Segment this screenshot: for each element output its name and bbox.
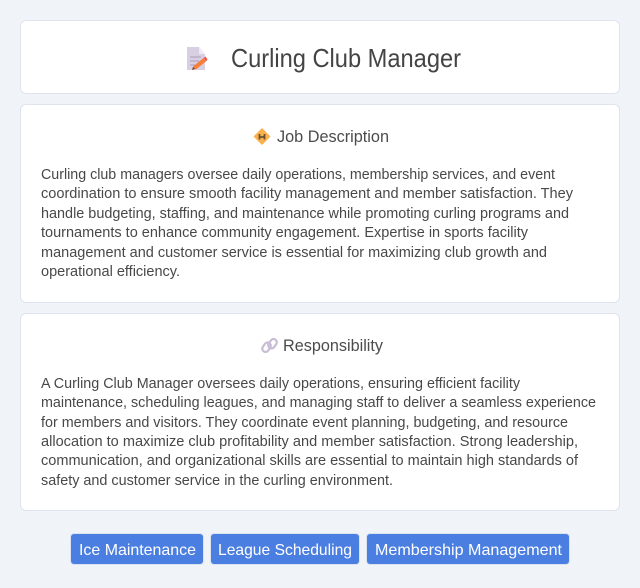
text: job description paragraph: tournaments to enhance community engagement. Expertise in sports facility [41, 225, 529, 241]
heading: responsibility: Responsibility [283, 336, 384, 355]
text: responsibility paragraph: safety and customer service in the curling environment. [41, 473, 393, 489]
text: responsibility paragraph: allocation to maximize club profitability and member satisfaction. Strong leadership, [41, 434, 578, 450]
text: job description paragraph: Curling club managers oversee daily operations, membership services, and event [41, 167, 555, 183]
tag labels: Membership Management [375, 542, 563, 559]
text: job description paragraph: management and customer service is essential for maximizing club growth and [41, 245, 547, 261]
panel: responsibility card [20, 313, 620, 511]
text: job description paragraph: operational efficiency. [41, 264, 180, 280]
text: responsibility paragraph: A Curling Club Manager oversees daily operations, ensuring efficient facility [41, 376, 521, 392]
panel: job description card [20, 104, 620, 303]
panel: title card [20, 20, 620, 94]
tag: membership management [367, 534, 569, 564]
icon: orange diamond [254, 129, 270, 144]
icon: chain link [261, 338, 278, 353]
text: responsibility paragraph [41, 376, 596, 489]
tag labels [79, 542, 563, 559]
tag labels: League Scheduling [218, 542, 352, 559]
tag labels: Ice Maintenance [79, 542, 196, 559]
text: responsibility paragraph: for members and visitors. They coordinate event planning, budgeting, and resource [41, 415, 568, 431]
text: responsibility paragraph: maintenance, scheduling leagues, and managing staff to deliver a seamless experience [41, 395, 596, 411]
text: job description paragraph: handle budgeting, staffing, and maintenance while promoting curling programs and [41, 206, 569, 222]
text: job description paragraph: coordination to ensure smooth facility management and member satisfaction. They [41, 186, 574, 202]
text: responsibility paragraph: communication, and organizational skills are essential to maintain high standards of [41, 453, 579, 469]
text: job description paragraph [41, 167, 574, 280]
tag: league scheduling [211, 534, 359, 564]
tag: ice maintenance [71, 534, 203, 564]
icon: document with pencil [187, 47, 208, 70]
title: Curling Club Manager [231, 43, 461, 73]
heading: job description: Job Description [277, 127, 389, 146]
